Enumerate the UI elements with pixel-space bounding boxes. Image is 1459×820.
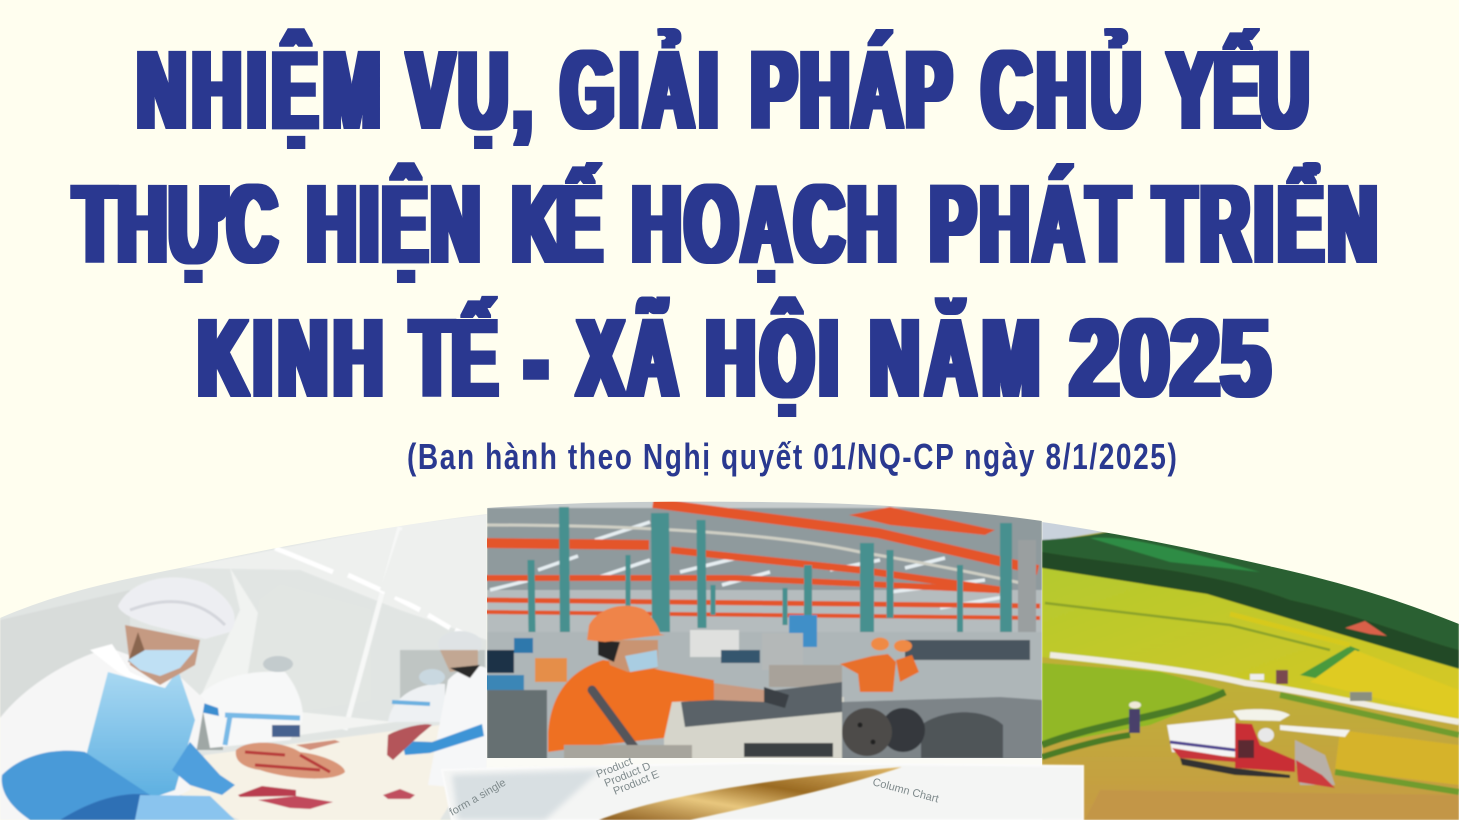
chart labels: Product D [603,760,653,790]
chart labels [448,755,940,819]
paper with chart and pen [442,755,1083,820]
grey pipe [487,525,1030,585]
title: THỰC [74,163,277,286]
title: PHÁP [751,29,951,152]
roof bracket [849,507,995,535]
people [1129,709,1140,733]
main worker [548,660,714,752]
subtitle: (Ban hành theo Nghị quyết 01/NQ-CP ngày 8/1/2025) [407,437,1177,477]
title: KẾ [512,163,602,286]
title: GIẢI [561,29,718,152]
title: HIỆN [307,163,480,286]
lathe [842,697,1042,760]
skylights [490,522,1010,608]
title: KINH [198,297,383,420]
title: - [525,272,547,443]
pipe at right [1016,540,1038,632]
hill [1042,530,1459,670]
title: HOẠCH [632,163,897,286]
photo: food processing workers [0,510,487,820]
background worker 2 [388,684,445,722]
lower green field [1042,663,1225,745]
title [74,29,1377,443]
chart labels: Product [595,755,634,781]
meat [236,743,345,779]
photo: factory worker [485,500,1042,760]
mask [128,650,195,676]
white gap under factory photo [487,755,1042,769]
house [1345,621,1387,636]
distant workers [840,654,896,692]
background worker 1 [200,672,303,748]
pen [599,767,902,820]
title: HỘI [706,297,838,420]
chart labels: form a single [448,777,508,819]
title: XÃ [578,297,677,420]
road [1050,655,1459,722]
columns [531,507,1006,648]
photo: rice field and harvester [1042,515,1459,820]
title: TẾ [411,297,497,420]
title: TRIỂN [1154,163,1377,286]
title: CHỦ [982,29,1141,152]
title: YẾU [1168,29,1309,152]
apron [85,670,195,802]
title: NĂM [870,297,1039,420]
chart labels: Product E [612,769,661,798]
upper field [1042,568,1459,722]
face and mask [603,640,658,672]
tool rod [592,690,642,758]
harvester [1167,718,1235,757]
hairnet [118,577,235,639]
table [182,725,448,820]
title: NHIỆM [137,29,380,152]
title: PHÁT [930,163,1129,286]
face [125,625,200,685]
foreground right worker [428,666,487,790]
chart labels: Column Chart [871,776,940,805]
title: VỤ, [408,29,532,152]
title: 2025 [1070,298,1270,420]
factory floor machinery [487,632,1042,760]
sleeve [2,751,150,820]
roof beams [485,503,1040,618]
hard hat [587,606,665,642]
main worker body [0,648,205,820]
